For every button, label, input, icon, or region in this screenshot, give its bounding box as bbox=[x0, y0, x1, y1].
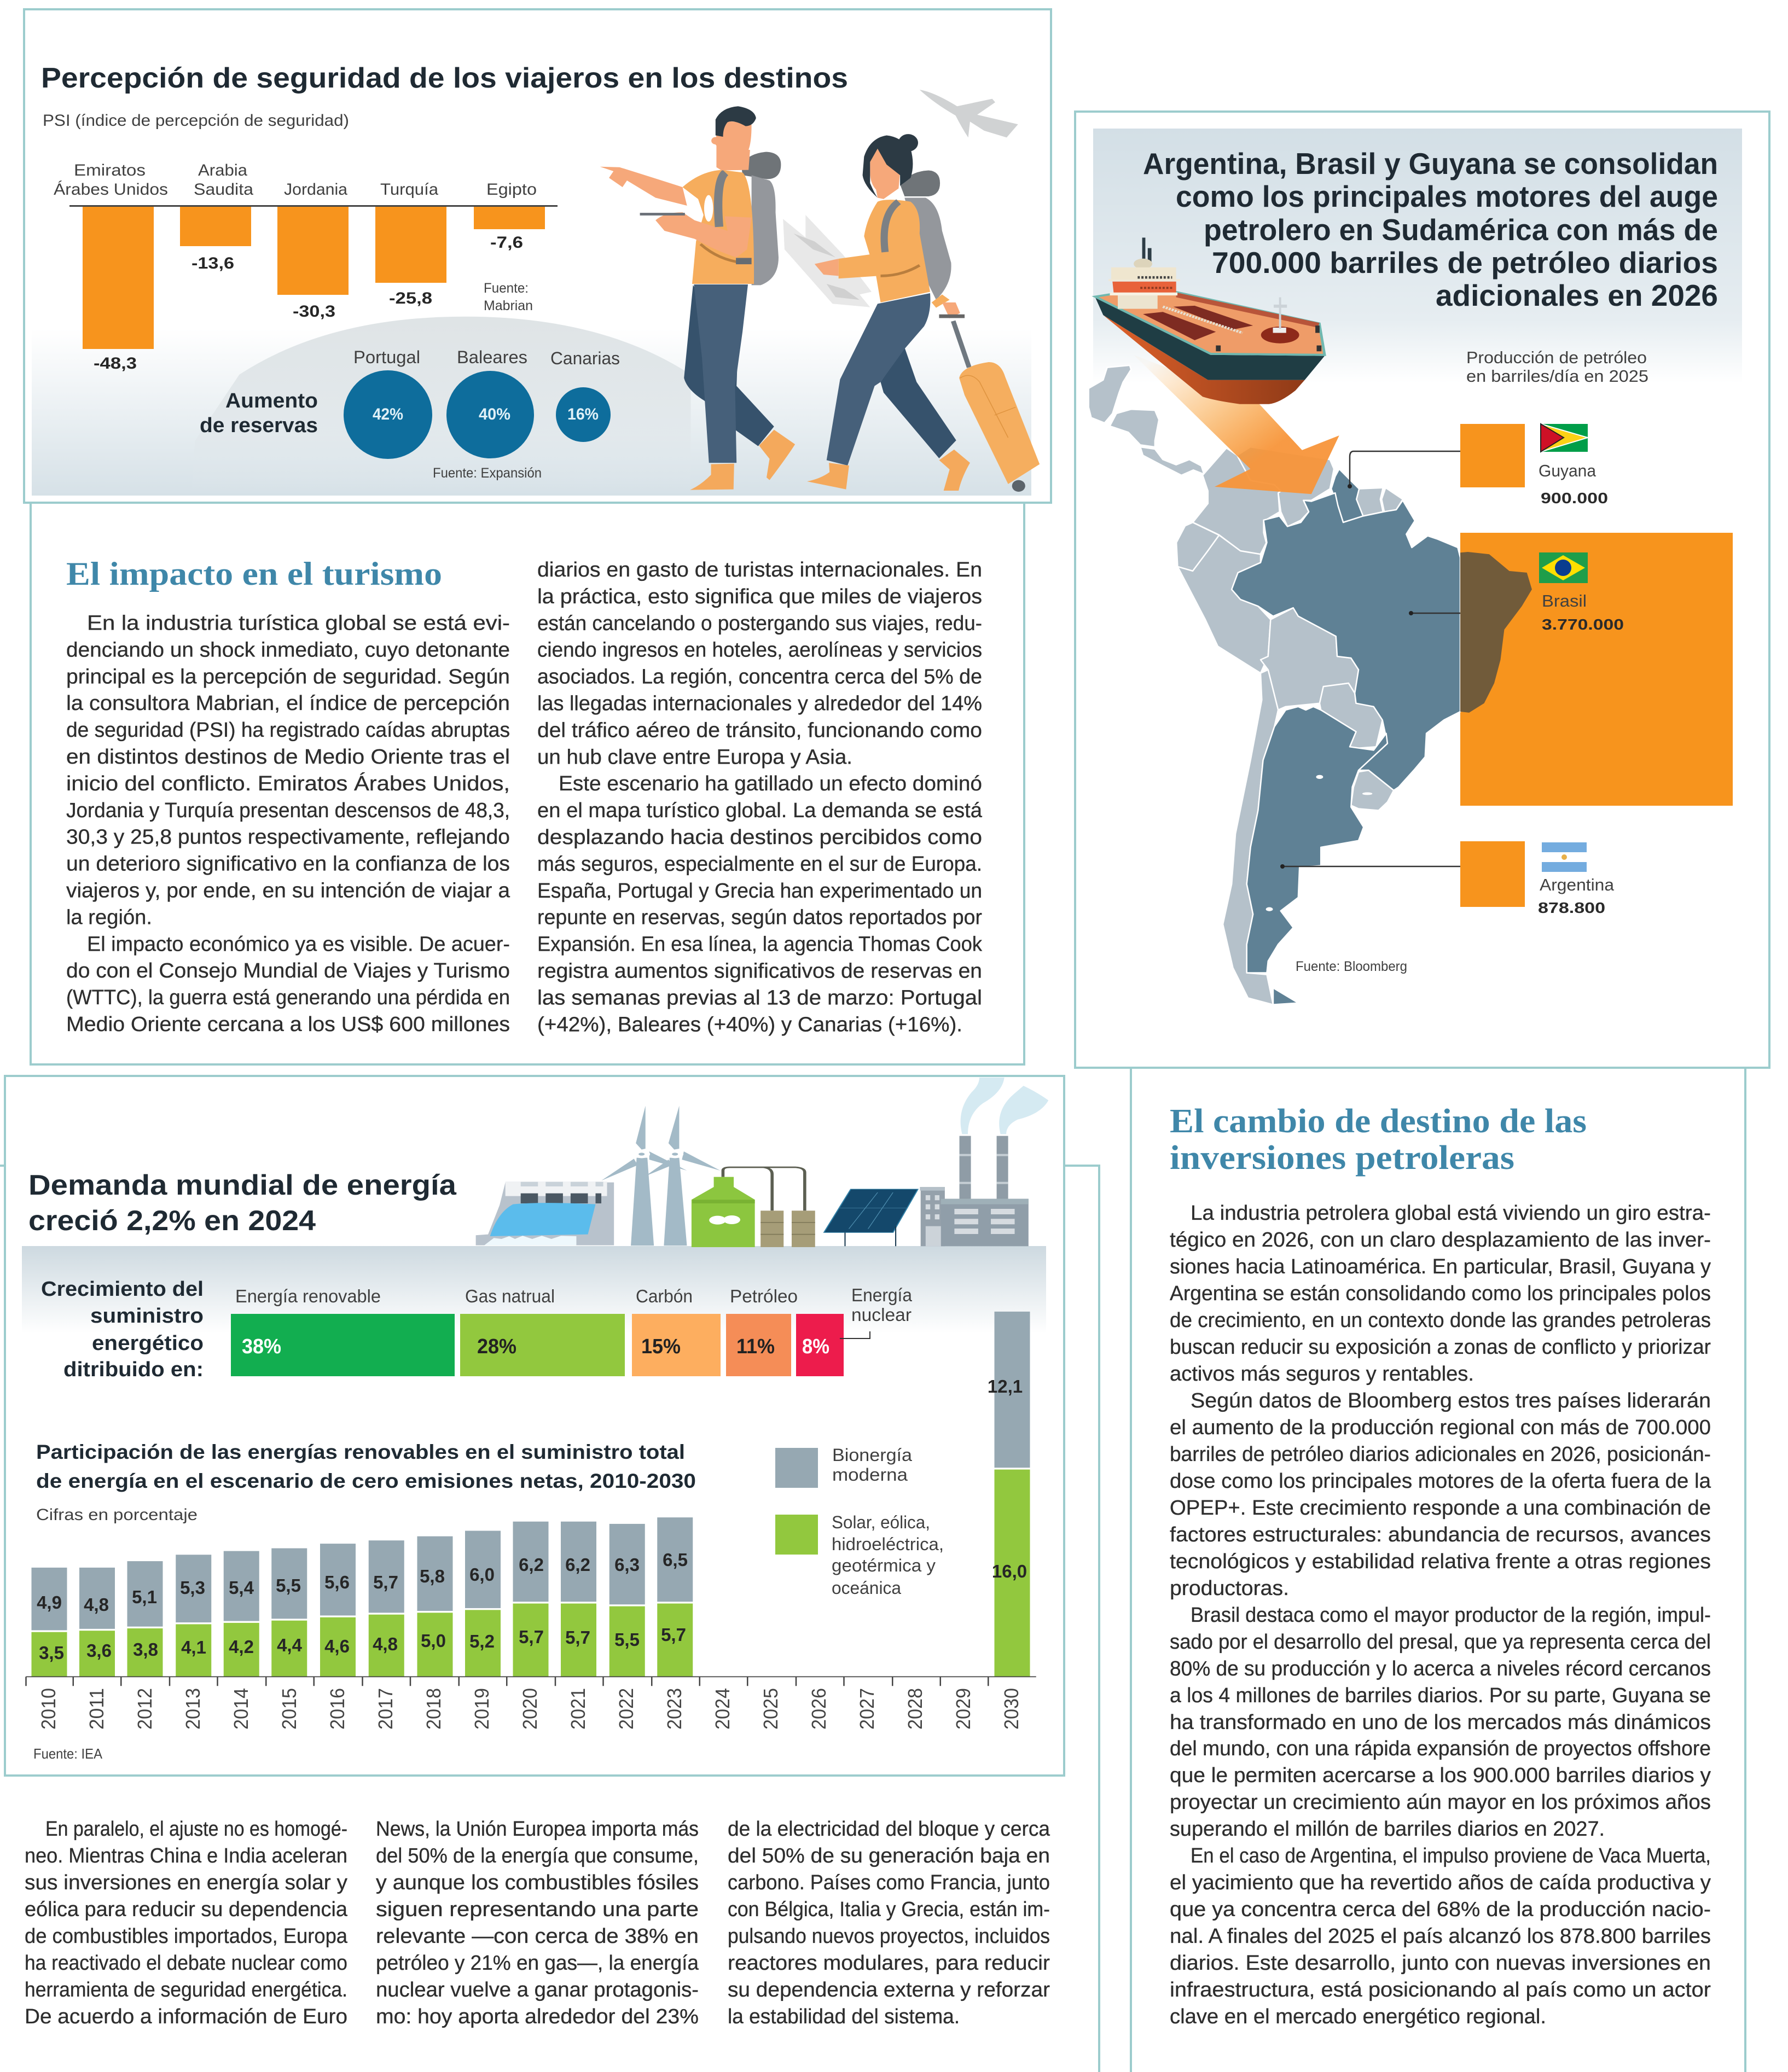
column 3: del 50% de su generación baja en bbox=[728, 1844, 1050, 1867]
band gradient bbox=[22, 1246, 1046, 1334]
stacked share bar: Energía renovable bbox=[235, 1286, 381, 1306]
body text: proyectar un crecimiento aún mayor en los próximos años bbox=[1170, 1791, 1711, 1814]
article: energy, three columns bbox=[25, 1818, 1050, 2028]
body text: de crecimiento, en un contexto donde las grandes petroleras bbox=[1170, 1309, 1711, 1332]
title: Percepción de seguridad de los viajeros en los destinos bbox=[41, 62, 848, 94]
bar chart: PSI: -48,3 bbox=[94, 354, 137, 373]
title: adicionales en 2026 bbox=[1436, 278, 1718, 312]
text column 2: asociados. La región, concentra cerca del 5% de bbox=[537, 666, 982, 689]
column 3: su dependencia externa y reforzar bbox=[728, 1978, 1050, 2001]
biofuel tanks bbox=[692, 1167, 815, 1247]
year axis: 2024 bbox=[711, 1688, 734, 1730]
year axis: 2021 bbox=[567, 1688, 589, 1730]
supply growth heading bbox=[41, 1278, 204, 1381]
column 1: de combustibles importados, Europa bbox=[25, 1925, 348, 1948]
column 2: News, la Unión Europea importa más bbox=[376, 1818, 699, 1841]
icon: oil tanker bbox=[1095, 237, 1325, 404]
text column 1: En la industria turística global se está evi- bbox=[87, 612, 510, 635]
body text: el yacimiento que ha revertido años de caída productiva y bbox=[1170, 1871, 1711, 1894]
body text: 80% de su producción y lo acerca a niveles récord cercanos bbox=[1170, 1657, 1711, 1680]
flag: Argentina bbox=[1542, 842, 1587, 872]
column 2: nuclear vuelve a ganar protagonis- bbox=[376, 1978, 699, 2001]
column 2: relevante —con cerca de 38% en bbox=[376, 1925, 699, 1948]
column 2: del 50% de la energía que consume, bbox=[376, 1844, 699, 1867]
supply growth heading: suministro bbox=[90, 1305, 204, 1328]
booking increase circles bbox=[200, 347, 620, 459]
text column 1: un deterioro significativo en la confianza de los bbox=[66, 853, 510, 876]
legend: hidroeléctrica, bbox=[832, 1534, 944, 1554]
man bbox=[600, 106, 795, 490]
title: Demanda mundial de energía bbox=[28, 1169, 457, 1201]
text column 1: El impacto económico ya es visible. De acuer- bbox=[87, 933, 510, 956]
body text: factores estructurales: abundancia de recursos, avances bbox=[1170, 1523, 1711, 1546]
body text: que le permiten acercarse a los 900.000 barriles diarios y bbox=[1170, 1764, 1711, 1787]
legend: Solar, eólica, bbox=[832, 1512, 930, 1532]
title: Argentina, Brasil y Guyana se consolidan bbox=[1143, 147, 1718, 181]
panel: South America oil bbox=[1075, 112, 1769, 1068]
chart subtitle: en barriles/día en 2025 bbox=[1466, 366, 1648, 386]
body text: En el caso de Argentina, el impulso proviene de Vaca Muerta, bbox=[1191, 1844, 1711, 1867]
stacked share bar bbox=[231, 1285, 913, 1376]
year axis: 2025 bbox=[759, 1688, 782, 1730]
illustration: energy sources bbox=[476, 1078, 1048, 1247]
year axis: 2012 bbox=[133, 1688, 156, 1730]
year axis: 2016 bbox=[326, 1688, 349, 1730]
source: Bloomberg: Fuente: Bloomberg bbox=[1296, 959, 1407, 974]
body text: clave en el mercado energético regional. bbox=[1170, 2005, 1546, 2028]
stacked share bar: nuclear bbox=[851, 1305, 912, 1325]
bar values: 4,2 bbox=[229, 1637, 254, 1657]
production: Argentina bbox=[1280, 841, 1615, 916]
bar values: 5,7 bbox=[661, 1625, 686, 1645]
production: Guyana: Guyana bbox=[1539, 461, 1597, 480]
stacked share bar: Petróleo bbox=[730, 1286, 798, 1306]
bar values: 3,8 bbox=[133, 1639, 158, 1660]
source: Mabrian: Mabrian bbox=[484, 298, 533, 313]
text column 2: desplazando hacia destinos percibidos como bbox=[537, 826, 982, 849]
bar values: 4,4 bbox=[277, 1635, 303, 1655]
body text: OPEP+. Este crecimiento responde a una combinación de bbox=[1170, 1497, 1711, 1520]
arrow from ship to South America bbox=[1134, 355, 1339, 494]
column 3: de la electricidad del bloque y cerca bbox=[728, 1818, 1050, 1841]
bar values: 12,1 bbox=[988, 1376, 1023, 1396]
supply growth heading: energético bbox=[92, 1332, 204, 1355]
title: creció 2,2% en 2024 bbox=[28, 1205, 316, 1237]
bar chart: PSI: -30,3 bbox=[293, 302, 335, 321]
bar chart: PSI: -13,6 bbox=[191, 254, 234, 272]
bar values: 5,8 bbox=[420, 1566, 445, 1586]
source: Expansión: Fuente: Expansión bbox=[433, 465, 542, 481]
bar chart: PSI: Árabes Unidos bbox=[54, 181, 168, 199]
stacked bar chart: renewables 2010-2030 bbox=[26, 1312, 1036, 1730]
column 1: eólica para reducir su dependencia bbox=[25, 1898, 348, 1921]
body text: ha transformado en uno de los mercados más dinámicos bbox=[1170, 1711, 1711, 1734]
text column 2: repunte en reservas, según datos reportados por bbox=[537, 906, 982, 929]
bar values: 3,5 bbox=[39, 1643, 64, 1663]
text column 2: España, Portugal y Grecia han experimentado un bbox=[537, 880, 982, 903]
stacked share bar: 28% bbox=[477, 1335, 516, 1358]
icon: plane bbox=[920, 90, 1018, 137]
bar chart: PSI: Arabia bbox=[198, 161, 247, 179]
chart subtitle: Cifras en porcentaje bbox=[36, 1506, 198, 1524]
booking increase circles: Canarias bbox=[550, 348, 620, 368]
dam bbox=[476, 1181, 614, 1245]
Brazil production square bbox=[1460, 533, 1733, 806]
bar chart: PSI: Emiratos bbox=[74, 161, 146, 179]
text column 2: diarios en gasto de turistas internacionales. En bbox=[537, 558, 982, 581]
body text: buscan reducir su exposición a zonas de conflicto y priorizar bbox=[1170, 1336, 1711, 1359]
stacked share bar: Carbón bbox=[636, 1286, 693, 1306]
body text: superando el millón de barriles diarios en 2027. bbox=[1170, 1818, 1605, 1841]
bar values: 4,8 bbox=[84, 1594, 109, 1615]
text column 2: del tráfico aéreo de tránsito, funcionando como bbox=[537, 719, 982, 742]
heading: El impacto en el turismo bbox=[66, 556, 442, 592]
column 1: herramienta de seguridad energética. bbox=[25, 1978, 347, 2001]
body text: La industria petrolera global está viviendo un giro estra- bbox=[1191, 1202, 1711, 1225]
booking increase circles: Aumento bbox=[225, 389, 318, 412]
legend: moderna bbox=[832, 1465, 908, 1485]
header gradient bbox=[1093, 129, 1742, 383]
heading: inversiones petroleras bbox=[1170, 1139, 1514, 1177]
text column 1: la región. bbox=[66, 906, 152, 929]
column 1: En paralelo, el ajuste no es homogé- bbox=[45, 1818, 347, 1841]
title: petrolero en Sudamérica con más de bbox=[1204, 213, 1718, 247]
bar values: 5,5 bbox=[614, 1629, 640, 1650]
supply growth heading: Crecimiento del bbox=[41, 1278, 204, 1301]
year axis bbox=[37, 1688, 1023, 1730]
year axis: 2013 bbox=[182, 1688, 204, 1730]
body text: Según datos de Bloomberg estos tres países liderarán bbox=[1191, 1389, 1711, 1412]
production: Brasil bbox=[1409, 552, 1624, 633]
year axis: 2011 bbox=[85, 1688, 108, 1730]
flag: Brazil bbox=[1539, 552, 1588, 583]
bar values: 5,4 bbox=[229, 1578, 254, 1598]
text column 2: Este escenario ha gatillado un efecto dominó bbox=[559, 772, 982, 795]
chart title: de energía en el escenario de cero emisiones netas, 2010-2030 bbox=[36, 1470, 696, 1492]
year axis: 2030 bbox=[1000, 1688, 1023, 1730]
chart title: Participación de las energías renovables en el suministro total bbox=[36, 1441, 685, 1463]
bar chart: PSI: Egipto bbox=[486, 181, 537, 199]
bar chart: PSI: -7,6 bbox=[490, 234, 523, 252]
illustration: travellers bbox=[600, 106, 1040, 492]
body text: que ya concentra cerca del 68% de la producción nacio- bbox=[1170, 1898, 1711, 1921]
legend: geotérmica y bbox=[832, 1556, 936, 1575]
flag: Guyana bbox=[1541, 424, 1588, 452]
body text: siones hacia Latinoamérica. En particular, Brasil, Guyana y bbox=[1170, 1255, 1711, 1278]
column 2: petróleo y 21% en gas—, la energía bbox=[376, 1952, 699, 1975]
text column 2: un hub clave entre Europa y Asia. bbox=[537, 746, 852, 769]
source: Mabrian: Fuente: bbox=[484, 281, 529, 296]
booking increase circles: 16% bbox=[567, 405, 599, 423]
text column 2: más seguros, especialmente en el sur de Europa. bbox=[537, 853, 982, 876]
body text: del mundo, con una rápida expansión de proyectos offshore bbox=[1170, 1737, 1711, 1760]
text column 1: principal es la percepción de seguridad. Según bbox=[66, 665, 510, 688]
bar values bbox=[37, 1376, 1027, 1663]
text column 1: inicio del conflicto. Emiratos Árabes Unidos, bbox=[66, 772, 510, 795]
stacked share bar: 15% bbox=[641, 1335, 681, 1358]
legend bbox=[775, 1445, 944, 1598]
panel: traveller safety perception bbox=[24, 9, 1051, 503]
column 1: neo. Mientras China e India aceleran bbox=[25, 1844, 347, 1867]
body text: dose como los principales motores de la oferta fuera de la bbox=[1170, 1470, 1711, 1493]
text column 1: Jordania y Turquía presentan descensos de 48,3, bbox=[66, 799, 510, 822]
body text: nal. A finales del 2025 el país alcanzó los 878.800 barriles bbox=[1170, 1925, 1711, 1948]
text column 2: las semanas previas al 13 de marzo: Portugal bbox=[537, 986, 982, 1009]
body text: Argentina se están consolidando como los principales polos bbox=[1170, 1282, 1711, 1305]
production: Brasil: Brasil bbox=[1542, 591, 1587, 610]
body text bbox=[1170, 1202, 1711, 2028]
text column 1: de seguridad (PSI) ha registrado caídas abruptas bbox=[66, 719, 510, 742]
bar values: 6,5 bbox=[663, 1550, 688, 1570]
map held by woman bbox=[783, 215, 872, 307]
chart subtitle: Producción de petróleo bbox=[1466, 348, 1647, 367]
bar values: 5,7 bbox=[373, 1572, 398, 1592]
panel frame: right column text bbox=[1131, 1061, 1745, 2072]
text column 1: 30,3 y 25,8 puntos respectivamente, reflejando bbox=[66, 826, 510, 849]
text column 2: registra aumentos significativos de reservas en bbox=[537, 959, 982, 982]
suitcase bbox=[939, 316, 1040, 492]
text column 1: viajeros y, por ende, en su intención de viajar a bbox=[66, 880, 510, 903]
column 2: siguen representando una parte bbox=[376, 1898, 699, 1921]
bar values: 6,3 bbox=[614, 1555, 640, 1575]
body text: activos más seguros y rentables. bbox=[1170, 1363, 1474, 1386]
legend: oceánica bbox=[832, 1578, 901, 1598]
chart title bbox=[36, 1441, 696, 1492]
year axis: 2028 bbox=[904, 1688, 926, 1730]
body text: el aumento de la producción regional con más de 700.000 bbox=[1170, 1416, 1711, 1439]
column 3: carbono. Países como Francia, junto bbox=[728, 1871, 1050, 1894]
year axis: 2019 bbox=[471, 1688, 493, 1730]
panel: tourism article bbox=[31, 503, 1024, 1064]
text column 2 bbox=[537, 558, 983, 1036]
dome background bbox=[191, 317, 690, 494]
stacked share bar: 38% bbox=[242, 1335, 281, 1358]
source: Mabrian bbox=[484, 281, 533, 313]
stacked share bar: Energía bbox=[851, 1285, 913, 1305]
body text: a los 4 millones de barriles diarios. Por su parte, Guyana se bbox=[1170, 1684, 1711, 1707]
body text: infraestructura, está posicionando al país como un actor bbox=[1170, 1978, 1711, 2001]
column 3: con Bélgica, Italia y Grecia, están im- bbox=[728, 1898, 1050, 1921]
bar values: 4,1 bbox=[181, 1637, 206, 1657]
source: IEA: Fuente: IEA bbox=[33, 1745, 103, 1762]
chart subtitle bbox=[1466, 348, 1648, 386]
production: Guyana bbox=[1348, 424, 1608, 507]
bar values: 6,0 bbox=[469, 1564, 495, 1585]
year axis: 2020 bbox=[519, 1688, 541, 1730]
booking increase circles: de reservas bbox=[200, 414, 318, 437]
bar values: 5,0 bbox=[421, 1631, 446, 1651]
text column 1: (WTTC), la guerra está generando una pérdida en bbox=[66, 986, 510, 1009]
bar chart: PSI: Saudita bbox=[194, 181, 253, 199]
panel frame: text frame behind energy section bbox=[0, 1166, 1099, 2072]
legend: Bionergía bbox=[832, 1445, 912, 1465]
woman bbox=[807, 134, 970, 491]
title bbox=[1143, 147, 1718, 312]
bar values: 6,2 bbox=[519, 1555, 544, 1575]
bar chart: PSI: Jordania bbox=[284, 181, 347, 199]
text column 1: do con el Consejo Mundial de Viajes y Turismo bbox=[66, 959, 510, 982]
bar values: 5,7 bbox=[519, 1627, 544, 1647]
text column 1: denciando un shock inmediato, cuyo detonante bbox=[66, 638, 510, 661]
stacked share bar: 11% bbox=[736, 1335, 775, 1358]
body text: sado por el desarrollo del presal, que ya representa cerca del bbox=[1170, 1631, 1711, 1654]
column 1: ha reactivado el debate nuclear como bbox=[25, 1952, 347, 1975]
bar values: 4,6 bbox=[324, 1636, 350, 1656]
year axis: 2017 bbox=[374, 1688, 397, 1730]
bar chart: PSI: Turquía bbox=[380, 181, 438, 199]
column 3: la estabilidad del sistema. bbox=[728, 2005, 960, 2028]
body text: barriles de petróleo diarios adicionales en 2026, posicionán- bbox=[1170, 1443, 1711, 1466]
column 1: De acuerdo a información de Euro bbox=[25, 2005, 347, 2028]
production: Argentina: 878.800 bbox=[1538, 899, 1605, 916]
year axis: 2010 bbox=[37, 1688, 60, 1730]
column 3: pulsando nuevos proyectos, incluidos bbox=[728, 1925, 1050, 1948]
year axis: 2014 bbox=[230, 1688, 252, 1730]
text column 2: en el mapa turístico global. La demanda se está bbox=[537, 799, 983, 822]
body text: diarios. Este desarrollo, junto con nuevas inversiones en bbox=[1170, 1952, 1711, 1975]
year axis: 2023 bbox=[663, 1688, 686, 1730]
column 1 bbox=[25, 1818, 348, 2028]
year axis: 2018 bbox=[422, 1688, 445, 1730]
body text: Brasil destaca como el mayor productor de la región, impul- bbox=[1191, 1604, 1711, 1627]
booking increase circles: Portugal bbox=[353, 347, 420, 367]
bar values: 3,6 bbox=[86, 1640, 112, 1661]
booking increase circles: 42% bbox=[373, 405, 403, 423]
text column 2: la práctica, esto significa que miles de viajeros bbox=[537, 585, 982, 608]
solar panel bbox=[824, 1189, 918, 1246]
year axis: 2026 bbox=[808, 1688, 830, 1730]
booking increase circles: Baleares bbox=[457, 347, 527, 367]
heading bbox=[1170, 1103, 1587, 1177]
map of the Americas bbox=[1089, 365, 1532, 1005]
stacked share bar: Gas natrual bbox=[465, 1286, 555, 1306]
production: Brasil: 3.770.000 bbox=[1542, 616, 1624, 633]
bar chart: PSI: -25,8 bbox=[389, 289, 432, 307]
column 3 bbox=[728, 1818, 1050, 2028]
article: oil investments bbox=[1170, 1103, 1711, 2028]
column 2 bbox=[376, 1818, 699, 2028]
text column 1: en distintos destinos de Medio Oriente tras el bbox=[66, 746, 510, 769]
bar values: 5,2 bbox=[469, 1631, 495, 1651]
text column 1: la consultora Mabrian, el índice de percepción bbox=[66, 692, 510, 715]
production: Guyana: 900.000 bbox=[1541, 490, 1608, 507]
production: Argentina: Argentina bbox=[1540, 875, 1615, 894]
title: 700.000 barriles de petróleo diarios bbox=[1212, 246, 1718, 280]
text column 2: ciendo ingresos en hoteles, aerolíneas y servicios bbox=[537, 639, 982, 662]
text column 1 bbox=[66, 612, 510, 1036]
text column 1: Medio Oriente cercana a los US$ 600 millones bbox=[66, 1013, 510, 1036]
bar values: 5,5 bbox=[276, 1575, 301, 1596]
text column 2: están cancelando o postergando sus viajes, redu- bbox=[537, 612, 982, 635]
bar chart: PSI bbox=[54, 161, 558, 373]
bar values: 4,9 bbox=[37, 1592, 62, 1613]
column 3: reactores modulares, para reducir bbox=[728, 1952, 1050, 1975]
body text: tecnológicos y estabilidad relativa frente a otras regiones bbox=[1170, 1550, 1711, 1573]
booking increase circles: 40% bbox=[479, 405, 510, 423]
stacked share bar: 8% bbox=[802, 1335, 829, 1358]
panel: world energy demand bbox=[5, 1076, 1064, 1776]
year axis: 2029 bbox=[952, 1688, 974, 1730]
bar values: 5,3 bbox=[180, 1578, 205, 1598]
text column 2: (+42%), Baleares (+40%) y Canarias (+16%). bbox=[537, 1013, 962, 1036]
factory bbox=[920, 1078, 1048, 1246]
supply growth heading: ditribuido en: bbox=[63, 1358, 204, 1381]
bar values: 5,1 bbox=[132, 1587, 157, 1607]
title: como los principales motores del auge bbox=[1176, 179, 1718, 213]
wind turbines bbox=[601, 1106, 720, 1245]
year axis: 2015 bbox=[278, 1688, 300, 1730]
bar values: 16,0 bbox=[992, 1561, 1027, 1581]
column 1: sus inversiones en energía solar y bbox=[25, 1871, 347, 1894]
body text: tégico en 2026, con un claro desplazamiento de las inver- bbox=[1170, 1229, 1711, 1252]
column 2: mo: hoy aporta alrededor del 23% bbox=[376, 2005, 699, 2028]
subtitle: PSI (índice de percepción de seguridad) bbox=[43, 112, 349, 130]
bar values: 5,7 bbox=[565, 1627, 590, 1648]
heading: El cambio de destino de las bbox=[1170, 1103, 1587, 1140]
year axis: 2027 bbox=[856, 1688, 878, 1730]
bar values: 4,8 bbox=[373, 1634, 398, 1654]
text column 2: Expansión. En esa línea, la agencia Thomas Cook bbox=[537, 933, 983, 956]
year axis: 2022 bbox=[615, 1688, 637, 1730]
bar values: 5,6 bbox=[324, 1572, 350, 1592]
background gradient bbox=[32, 329, 1031, 496]
bar values: 6,2 bbox=[565, 1555, 590, 1575]
text column 2: las llegadas internacionales y alrededor del 14% bbox=[537, 692, 982, 715]
title bbox=[28, 1169, 457, 1237]
column 2: y aunque los combustibles fósiles bbox=[376, 1871, 699, 1894]
body text: productoras. bbox=[1170, 1577, 1289, 1600]
